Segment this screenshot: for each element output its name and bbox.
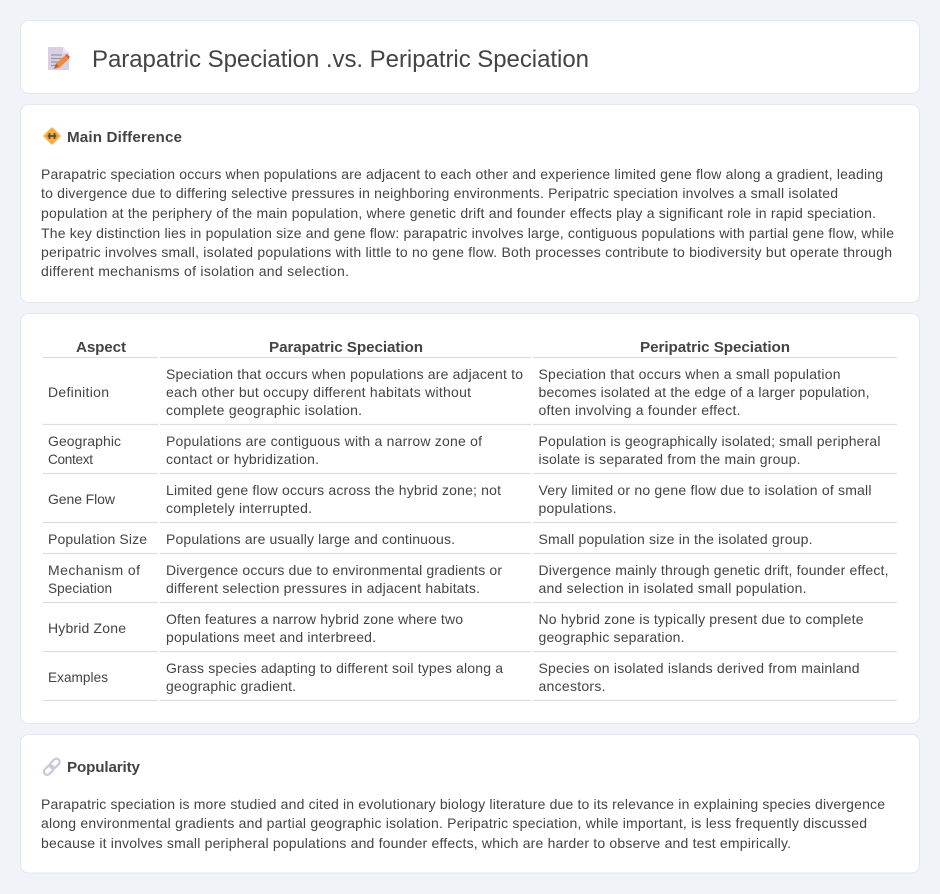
table row: examples: ancestors. <box>538 678 606 694</box>
text block: main difference paragraph: peripatric involves small, isolated populations with little to no gene flow. Both processes contribute to biodiversity but operate through <box>41 244 892 260</box>
panel: main difference <box>20 104 920 302</box>
table row: gene flow: Gene Flow <box>48 491 116 507</box>
table header row: Aspect <box>76 339 126 356</box>
table row: geographic context: isolate is separated from the main group. <box>538 451 800 467</box>
table row: mechanism of speciation: and selection in isolated small population. <box>538 580 806 596</box>
table header row: Parapatric Speciation <box>269 339 423 356</box>
table row: gene flow: populations. <box>538 500 616 516</box>
table header row: Peripatric Speciation <box>640 339 790 356</box>
table row: population size: Population Size <box>48 531 147 547</box>
table row: gene flow: Very limited or no gene flow due to isolation of small <box>538 482 872 498</box>
table row: geographic context: Geographic <box>48 433 121 449</box>
table row: hybrid zone: geographic separation. <box>538 629 684 645</box>
text block: main difference paragraph <box>41 166 894 279</box>
panel: comparison table <box>20 314 920 724</box>
table row: definition: becomes isolated at the edge of a larger population, <box>538 384 870 400</box>
table row: mechanism of speciation: Divergence mainly through genetic drift, founder effect, <box>538 562 888 578</box>
table row: geographic context: Populations are contiguous with a narrow zone of <box>166 433 482 449</box>
table row: mechanism of speciation: different selection pressures in adjacent habitats. <box>166 580 480 596</box>
heading: main difference: Main Difference <box>67 129 182 146</box>
text block: popularity paragraph <box>41 796 885 851</box>
table row: definition: Speciation that occurs when a small population <box>538 366 840 382</box>
table row: examples: Species on isolated islands derived from mainland <box>538 660 860 676</box>
text block: main difference paragraph: population at the periphery of the main population, where genetic drift and founder effects play a significant role in rapid speciation. <box>41 205 876 221</box>
table row: population size: Populations are usually large and continuous. <box>166 531 455 547</box>
table row: hybrid zone: No hybrid zone is typically present due to complete <box>538 611 864 627</box>
panel: popularity <box>20 734 920 873</box>
table row: examples: Grass species adapting to different soil types along a <box>166 660 503 676</box>
table row: geographic context: Population is geographically isolated; small peripheral <box>538 433 880 449</box>
table row: mechanism of speciation <box>48 562 888 596</box>
table row: hybrid zone <box>48 611 864 645</box>
table row: mechanism of speciation: Speciation <box>48 581 112 596</box>
table row: hybrid zone: Hybrid Zone <box>48 620 126 636</box>
table row: geographic context: Context <box>48 452 93 467</box>
text block: main difference paragraph: Parapatric speciation occurs when populations are adjacent to each other and experience limited gene flow along a gradient, leading <box>41 166 883 182</box>
table row: gene flow <box>48 482 872 516</box>
table row: mechanism of speciation: Divergence occurs due to environmental gradients or <box>166 562 502 578</box>
table row: geographic context <box>48 433 880 467</box>
table row: gene flow: completely interrupted. <box>166 500 312 516</box>
heading: popularity: Popularity <box>67 759 141 776</box>
table row: population size <box>48 531 812 547</box>
table row: definition <box>48 366 870 418</box>
icon: orange diamond sign <box>44 128 60 144</box>
table row: definition: Definition <box>48 384 109 400</box>
text block: main difference paragraph: different mechanisms of isolation and selection. <box>41 263 349 279</box>
text block: main difference paragraph: The key distinction lies in population size and gene flow: parapatric involves large, contiguous populations with partial gene flow, while <box>41 225 894 241</box>
panel: title header <box>20 20 920 94</box>
table row: definition: often involving a founder effect. <box>538 402 740 418</box>
table row: population size: Small population size in the isolated group. <box>538 531 812 547</box>
table row: definition: Speciation that occurs when populations are adjacent to <box>166 366 523 382</box>
table row: examples: Examples <box>48 670 108 685</box>
table row: examples <box>48 660 860 694</box>
table row: geographic context: contact or hybridization. <box>166 451 319 467</box>
text block: popularity paragraph: because it involves small peripheral populations and founder effects, which are harder to observe and test empirically. <box>41 835 791 851</box>
text block: popularity paragraph: along environmental gradients and partial geographic isolation. Peripatric speciation, while important, is less frequently discussed <box>41 815 867 831</box>
table row: definition: each other but occupy different habitats without <box>166 384 471 400</box>
table row: hybrid zone: populations meet and interbreed. <box>166 629 376 645</box>
icon: document with pencil <box>48 47 70 70</box>
table row: definition: complete geographic isolation. <box>166 402 362 418</box>
text block: main difference paragraph: to divergence due to differing selective pressures in neighboring environments. Peripatric speciation involves a small isolated <box>41 185 838 201</box>
text block: popularity paragraph: Parapatric speciation is more studied and cited in evolutionary biology literature due to its relevance in explaining species divergence <box>41 796 885 812</box>
table row: gene flow: Limited gene flow occurs across the hybrid zone; not <box>166 482 501 498</box>
table row: mechanism of speciation: Mechanism of <box>48 562 140 578</box>
title: Parapatric Speciation .vs. Peripatric Speciation <box>92 46 589 73</box>
table header row <box>76 339 790 356</box>
table row: examples: geographic gradient. <box>166 678 296 694</box>
table row: hybrid zone: Often features a narrow hybrid zone where two <box>166 611 463 627</box>
icon: chain link <box>43 757 61 776</box>
